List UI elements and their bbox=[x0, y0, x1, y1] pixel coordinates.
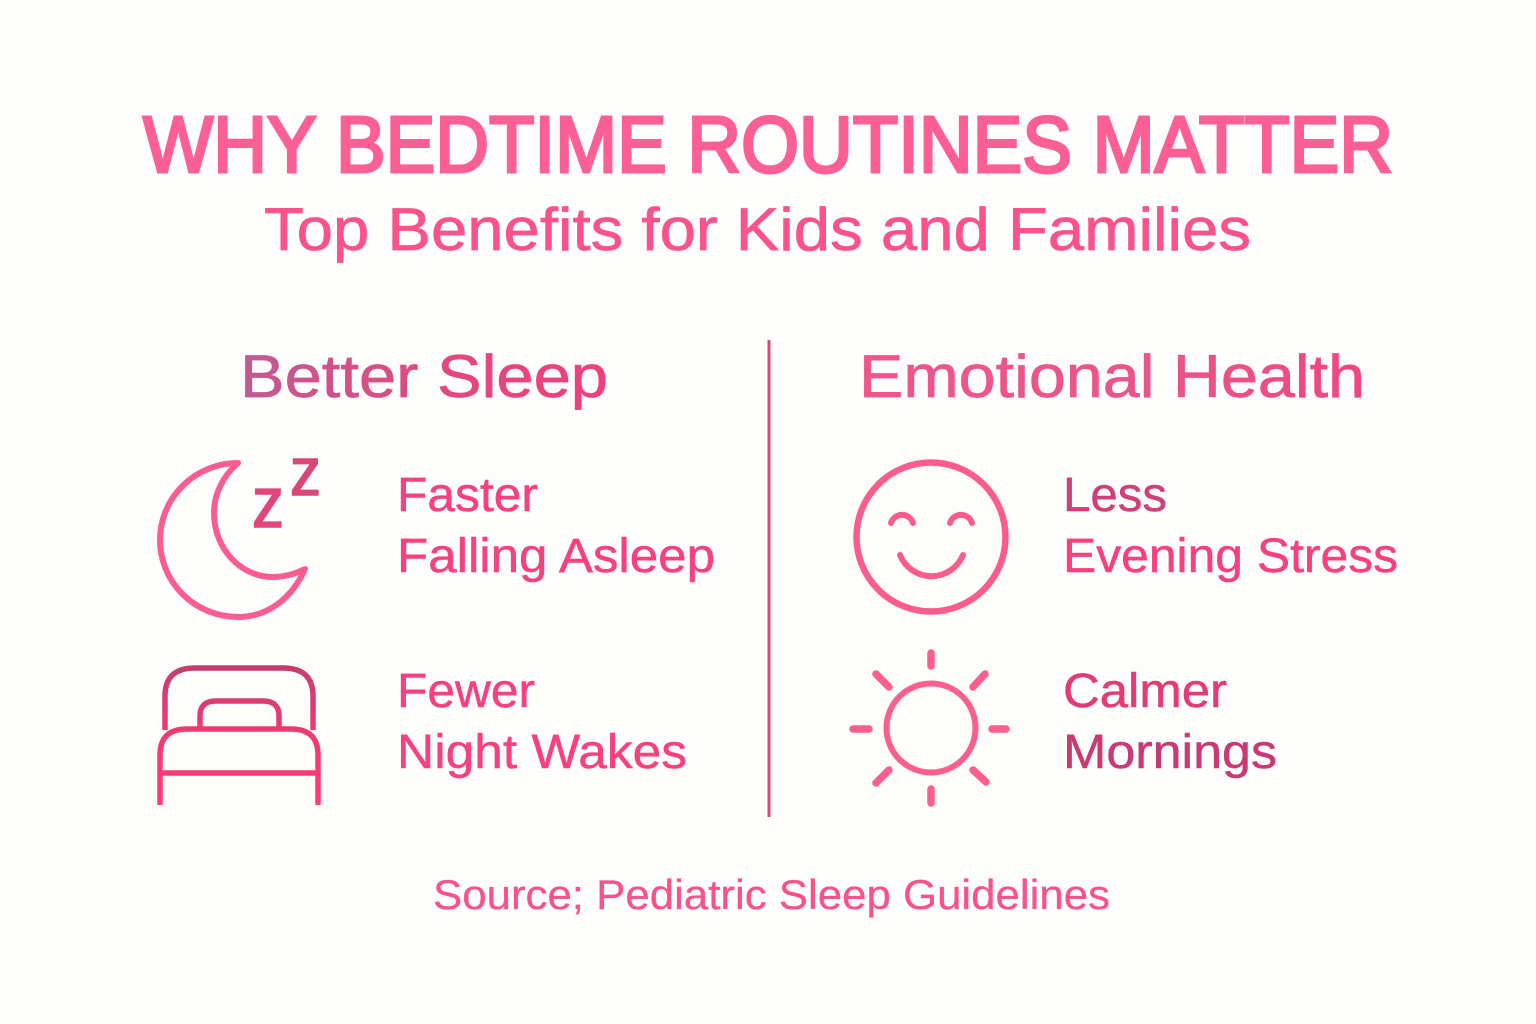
panel: emotional health bbox=[853, 343, 1398, 803]
benefit: fewer night wakes: Fewer bbox=[397, 665, 535, 718]
divider bbox=[768, 340, 770, 817]
subtitle: Top Benefits for Kids and Families bbox=[264, 196, 1251, 263]
title: WHY BEDTIME ROUTINES MATTER bbox=[143, 100, 1393, 189]
benefit: calmer mornings: Mornings bbox=[1063, 726, 1277, 779]
icon: crescent moon with z's bbox=[160, 434, 321, 617]
benefit: calmer mornings bbox=[1063, 665, 1277, 779]
source note: Source; Pediatric Sleep Guidelines bbox=[433, 871, 1110, 918]
benefit: less evening stress: Less bbox=[1063, 469, 1167, 522]
icon: smiling face bbox=[856, 462, 1006, 612]
panel: better sleep bbox=[160, 343, 715, 805]
icon: bed bbox=[160, 668, 318, 805]
benefit: less evening stress: Evening Stress bbox=[1063, 530, 1398, 583]
icon: crescent moon with z's: z bbox=[290, 434, 321, 510]
benefit: less evening stress bbox=[1063, 469, 1398, 583]
icon: sun bbox=[853, 653, 1006, 803]
heading: better sleep: Better Sleep bbox=[240, 343, 608, 410]
benefit: calmer mornings: Calmer bbox=[1063, 665, 1227, 718]
benefit: faster falling asleep: Falling Asleep bbox=[397, 530, 715, 583]
benefit: faster falling asleep: Faster bbox=[397, 469, 538, 522]
heading: emotional health: Emotional Health bbox=[859, 343, 1365, 410]
header bbox=[143, 100, 1393, 263]
benefit: fewer night wakes: Night Wakes bbox=[397, 726, 687, 779]
icon: crescent moon with z's: z bbox=[252, 464, 284, 543]
benefit: faster falling asleep bbox=[397, 469, 715, 583]
benefit: fewer night wakes bbox=[397, 665, 687, 779]
